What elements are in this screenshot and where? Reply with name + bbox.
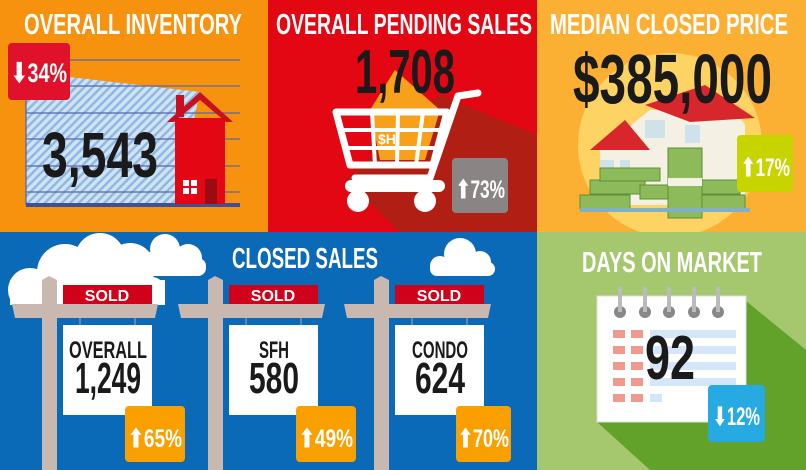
badge: down 12%: ⬇12% <box>713 403 760 431</box>
sign: overall: SOLD <box>85 288 129 305</box>
chart: inventory area <box>26 60 240 207</box>
badge: up 73% <box>452 158 508 213</box>
sign: sfh <box>178 276 356 470</box>
badge: down 12% <box>708 385 765 442</box>
badge: down 34% <box>8 43 70 100</box>
sign: sfh: ⬆49% <box>299 425 353 453</box>
icon: clouds <box>8 233 495 312</box>
panel: median closed price <box>537 0 806 237</box>
icon: house with money <box>580 85 755 218</box>
badge: up 17% <box>737 135 793 192</box>
heading: closed sales: CLOSED SALES <box>232 243 378 275</box>
sign: overall <box>12 276 185 470</box>
sign: condo: 624 <box>415 354 465 403</box>
sign: condo: SOLD <box>417 288 461 305</box>
sign: condo <box>344 276 511 470</box>
icon: red house <box>167 92 233 204</box>
sign: overall: OVERALL <box>69 337 147 364</box>
sign: overall: ⬆65% <box>128 425 182 453</box>
badge: up 73%: ⬆73% <box>456 176 505 204</box>
heading: overall inventory: OVERALL INVENTORY <box>24 9 242 41</box>
panel: days on market <box>537 232 806 470</box>
sign: overall: 1,249 <box>75 354 141 403</box>
panel: overall pending sales <box>268 0 537 232</box>
heading: overall pending sales: OVERALL PENDING SALES <box>276 9 532 41</box>
panel: closed sales <box>0 232 537 470</box>
sign: sfh: 580 <box>249 354 299 403</box>
badge: down 34%: ⬇34% <box>11 58 67 88</box>
number: 1,708: 1,708 <box>355 38 455 107</box>
sign: sfh: SOLD <box>251 288 295 305</box>
panel: overall inventory <box>0 0 268 232</box>
sign: condo: ⬆70% <box>458 425 509 453</box>
sign: condo: CONDO <box>412 337 468 364</box>
icon: shopping cart <box>336 70 478 212</box>
sign: sfh: SFH <box>259 337 289 364</box>
number: 3,543: 3,543 <box>42 119 158 191</box>
number: 92: 92 <box>645 324 695 393</box>
icon: shopping cart: $H <box>378 131 396 147</box>
icon: calendar <box>597 287 746 422</box>
